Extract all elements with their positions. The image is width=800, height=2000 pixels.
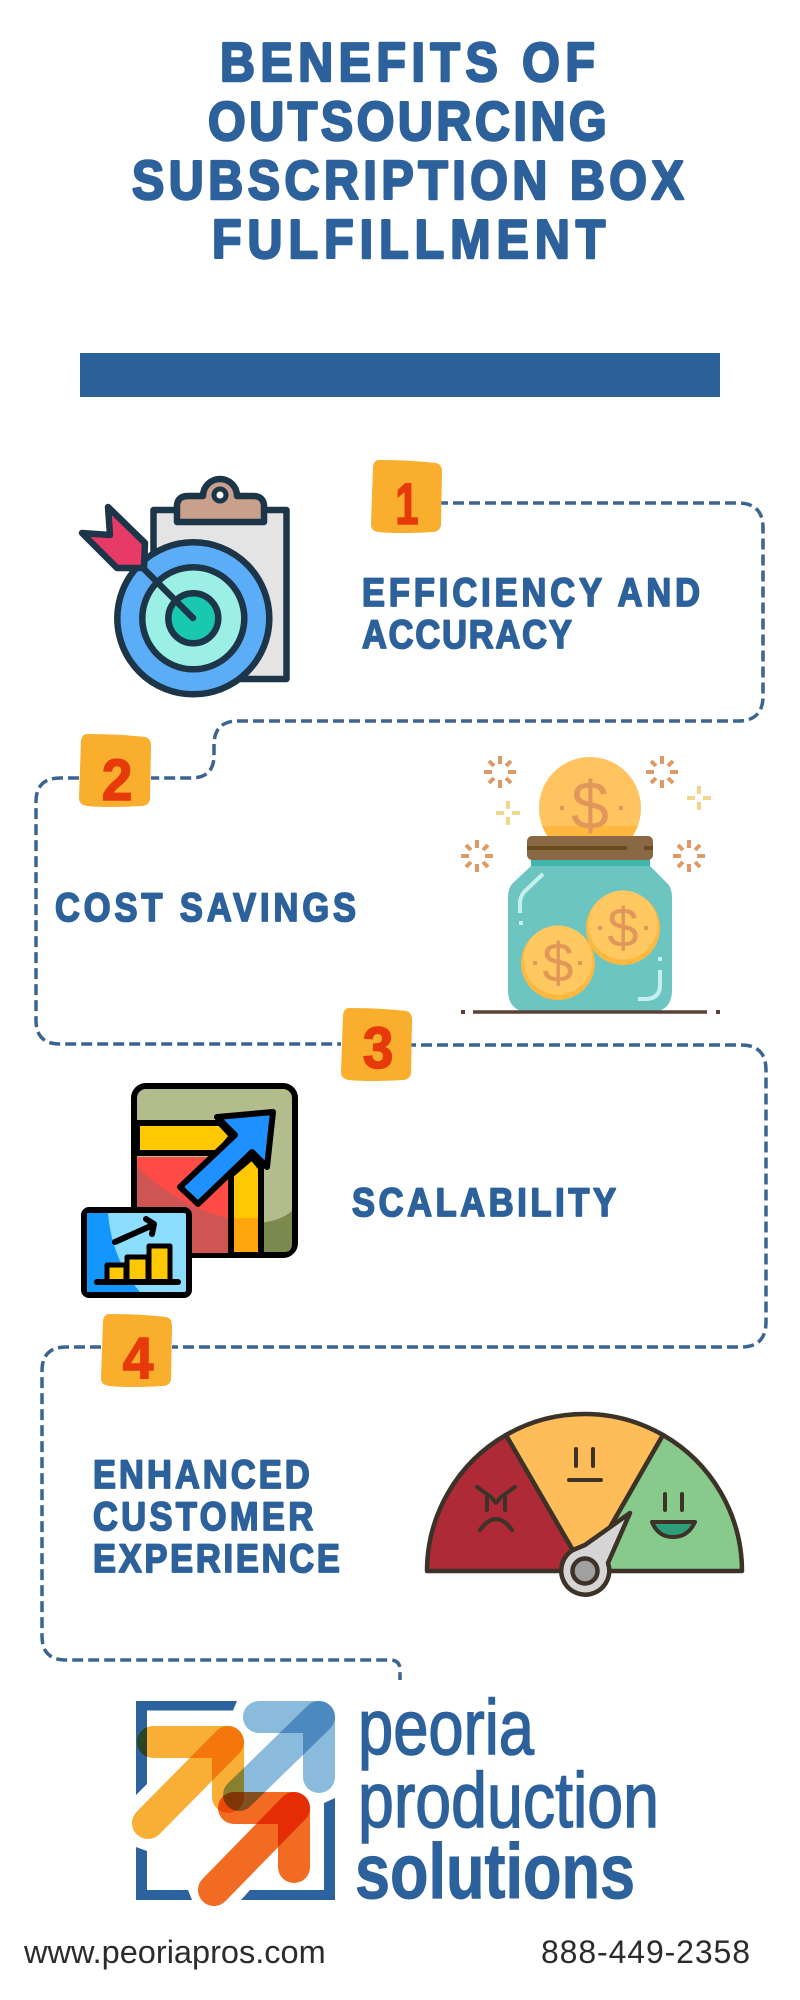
logo wordmark [355,1683,659,1915]
badge 3: 3 [363,1016,393,1080]
badge 2 [79,734,151,812]
heading: enhanced customer experience: EXPERIENCE [93,1536,340,1581]
title [132,31,684,270]
icon: coin jar: $ [542,931,574,994]
badge 2: 2 [102,748,132,812]
badge 1: 1 [395,471,419,537]
logo [136,1683,659,1915]
footer phone: 888-449-2358 [541,1934,750,1970]
badge 3 [341,1008,412,1081]
heading: enhanced customer experience [93,1452,340,1581]
logo wordmark: production [358,1756,659,1844]
logo mark [136,1701,335,1900]
title: SUBSCRIPTION BOX [132,149,684,211]
heading: efficiency and accuracy: EFFICIENCY AND [362,570,700,615]
icon: coin jar [461,756,720,1014]
icon: target on clipboard [82,479,286,694]
header bar [80,353,720,397]
heading: enhanced customer experience: CUSTOMER [93,1494,313,1539]
footer website: www.peoriapros.com [23,1934,326,1970]
badge 4: 4 [123,1326,154,1390]
title: BENEFITS OF [220,31,595,93]
icon: satisfaction gauge [427,1414,742,1595]
icon: growth chart [84,1086,295,1295]
badge 1 [371,460,442,537]
title: FULFILLMENT [212,208,606,270]
badge 4 [101,1314,172,1390]
dashed connector path [36,503,766,1680]
heading: efficiency and accuracy: ACCURACY [362,612,572,657]
icon: coin jar: $ [607,896,639,959]
heading: enhanced customer experience: ENHANCED [93,1452,310,1497]
icon: coin jar: $ [571,768,609,844]
logo wordmark: peoria [358,1683,534,1771]
heading: efficiency and accuracy [362,570,700,657]
title: OUTSOURCING [208,90,607,152]
heading: cost savings: COST SAVINGS [55,885,356,930]
logo wordmark: solutions [355,1827,635,1915]
heading: scalability: SCALABILITY [352,1180,616,1225]
